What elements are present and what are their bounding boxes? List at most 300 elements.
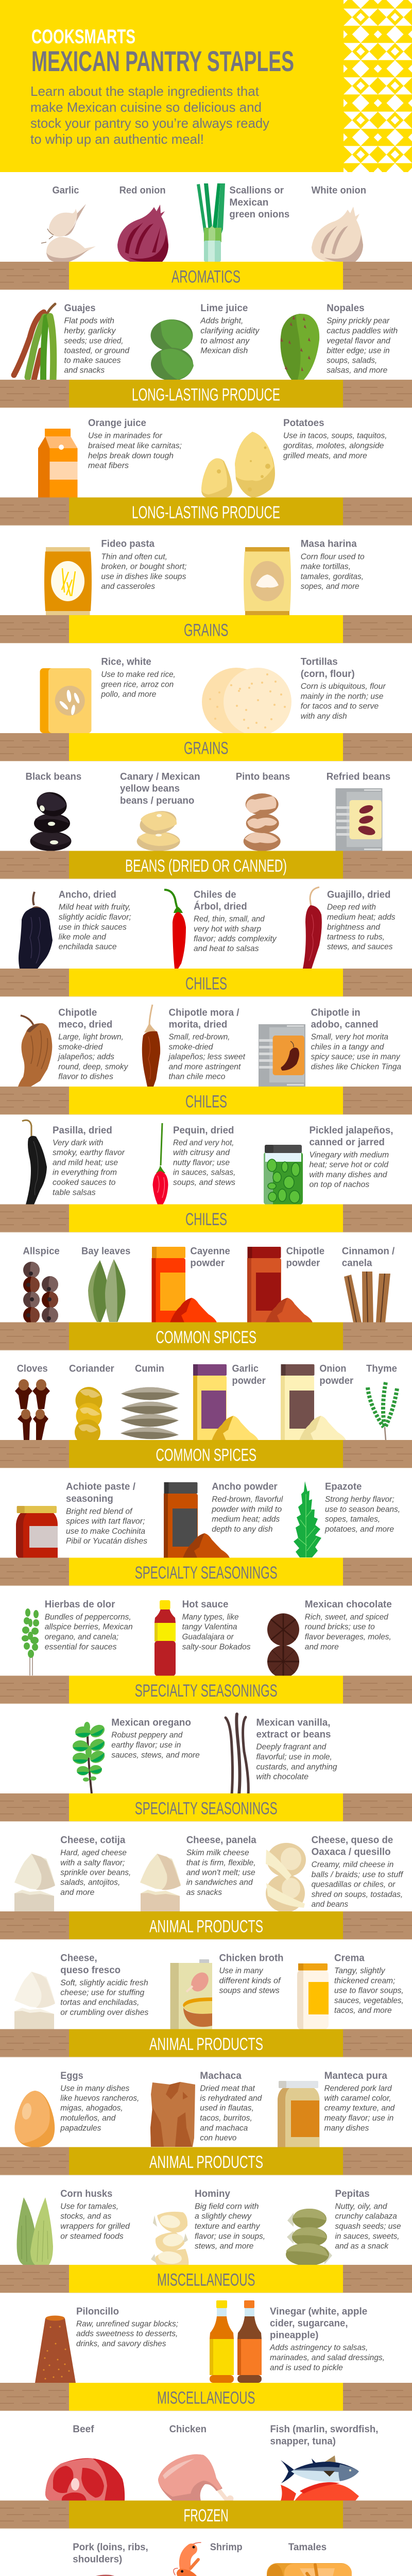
icon: hominy	[151, 2212, 188, 2265]
description	[60, 1978, 148, 2017]
description: meat fibers	[88, 461, 129, 470]
description: cheese; use for stuffing	[60, 1988, 144, 1997]
description: Flat pods with	[64, 317, 114, 326]
panel: chiles 1	[19, 887, 396, 969]
icon: refried beans can	[336, 788, 382, 851]
name	[66, 1481, 136, 1504]
name: Rice, white	[101, 656, 151, 668]
description: and beans	[312, 1900, 348, 1909]
shelf: aromatics: AROMATICS	[171, 267, 241, 286]
description: for tacos and to serve	[301, 702, 379, 711]
icon: cumin seeds	[121, 1387, 180, 1439]
icon: adobo can	[259, 1024, 305, 1087]
item: allspice	[23, 1245, 60, 1324]
shelf: chiles 1	[0, 969, 412, 997]
name: Cheese,	[60, 1953, 97, 1964]
icon: thyme	[368, 1382, 397, 1440]
name: Mexican vanilla,	[256, 1717, 331, 1728]
label: Black beans	[26, 771, 81, 782]
icon: ancho chile	[19, 892, 53, 969]
name: Corn husks	[60, 2188, 112, 2199]
description: Use in many	[219, 1967, 263, 1975]
label: shoulders)	[73, 2553, 122, 2565]
intro text: stock your pantry so you’re always ready	[30, 115, 269, 131]
shelf: aromatics	[0, 262, 412, 290]
name: Hot sauce	[182, 1599, 229, 1610]
item: onion powder	[281, 1363, 354, 1440]
description: pollo, and more	[100, 690, 156, 699]
name: Cheese, queso de	[312, 1835, 393, 1846]
name	[311, 1007, 379, 1030]
item: corn husks	[17, 2188, 130, 2265]
name: Pickled jalapeños,	[309, 1125, 393, 1136]
shelf: long-lasting produce 2: LONG-LASTING PRODUCE	[132, 503, 280, 522]
shelf: miscellaneous 2	[0, 2383, 412, 2411]
panel: specialty seasonings 3	[73, 1714, 337, 1795]
description: Mexican dish	[200, 346, 248, 355]
description: Spiny prickly pear	[327, 317, 390, 326]
icon: garlic powder jar	[193, 1364, 259, 1440]
description	[88, 432, 182, 470]
panel: long-lasting produce 2	[38, 417, 387, 498]
icon: tortillas	[202, 668, 291, 736]
name: cider, sugarcane,	[270, 2317, 348, 2329]
item: pork	[71, 2541, 148, 2576]
description	[301, 552, 365, 591]
description	[200, 317, 260, 355]
description: with chocolate	[256, 1772, 308, 1781]
icon: arbol chile	[164, 890, 186, 969]
description	[283, 432, 387, 460]
description: with citrusy and	[173, 1148, 230, 1157]
description: marinades, and salad dressings,	[270, 2353, 385, 2362]
icon: corn husks	[17, 2197, 53, 2265]
panel: frozen 2	[71, 2541, 352, 2576]
item: rice	[40, 656, 176, 733]
panel: beans	[26, 771, 390, 851]
item: shrimp	[173, 2541, 243, 2576]
item: mexican vanilla	[226, 1714, 337, 1795]
description: earthy flavor; use in	[111, 1741, 181, 1750]
label: Allspice	[23, 1245, 60, 1257]
name: Hominy	[195, 2188, 230, 2199]
name	[58, 1007, 112, 1030]
item: white onion	[312, 185, 366, 262]
name: Ancho powder	[212, 1481, 278, 1493]
description	[195, 2202, 265, 2250]
icon: cotija cheese	[14, 1854, 55, 1911]
label: Tamales	[288, 2541, 327, 2553]
description	[182, 1613, 251, 1651]
description: Red, thin, small, and	[194, 915, 265, 924]
description: Use in tacos, soups, taquitos,	[283, 432, 387, 440]
item: garlic powder	[193, 1363, 266, 1440]
description: smoke-dried	[169, 1043, 214, 1052]
description: adds sweetness to desserts,	[76, 2330, 178, 2338]
shelf: frozen 1	[0, 2501, 412, 2529]
label: Cinnamon /	[342, 1245, 395, 1257]
description	[64, 317, 130, 375]
label: Scallions or	[229, 185, 284, 196]
intro text: Learn about the staple ingredients that	[30, 83, 260, 99]
description: tartness to rubs,	[327, 933, 385, 941]
name: Chiles de	[194, 889, 236, 900]
name: Masa harina	[301, 538, 357, 550]
description	[111, 1731, 200, 1759]
description: and snacks	[64, 366, 105, 375]
description: Vinegary with medium	[309, 1150, 389, 1159]
item: bay leaves	[81, 1245, 131, 1322]
description: grilled meats, and more	[283, 451, 367, 460]
name	[194, 889, 247, 912]
description: flavor; adds complexity	[194, 935, 277, 943]
description: sprinkle over beans,	[60, 1869, 131, 1877]
description	[219, 1967, 281, 1995]
description	[173, 1139, 235, 1187]
shelf: common spices 1: COMMON SPICES	[156, 1328, 256, 1347]
shelf: beans	[0, 851, 412, 879]
description: use in dishes like soups	[101, 572, 186, 581]
intro text: make Mexican cuisine so delicious and	[30, 99, 262, 115]
label: snapper, tuna)	[270, 2435, 336, 2447]
icon: epazote	[294, 1481, 321, 1557]
shelf: common spices 1	[0, 1322, 412, 1351]
intro text: to whip up an authentic meal!	[30, 131, 204, 147]
description	[60, 1849, 131, 1897]
icon: meco chile	[18, 1015, 52, 1087]
name: Machaca	[200, 2070, 242, 2081]
description: Mild heat with fruity,	[59, 903, 131, 912]
description	[60, 2202, 130, 2241]
description: with a salty flavor;	[60, 1858, 125, 1867]
item: scallions	[197, 183, 289, 262]
label: Pork (loins, ribs,	[73, 2541, 148, 2553]
description: smoke-dried	[58, 1043, 103, 1052]
description: Deep red with	[327, 903, 376, 912]
description	[76, 2319, 178, 2348]
description	[45, 1613, 133, 1651]
description: table salsas	[53, 1188, 96, 1197]
description: round, deep, smoky	[58, 1062, 128, 1071]
name: Chipotle	[58, 1007, 97, 1018]
panel: grains 1	[44, 538, 365, 615]
item: pinto beans	[236, 771, 290, 851]
description: and heat to salsas	[194, 944, 259, 953]
description: crunchy calabaza	[335, 2212, 397, 2221]
description: is rehydrated and	[200, 2094, 262, 2103]
item: hierbas de olor	[22, 1599, 133, 1675]
icon: oregano	[73, 1722, 107, 1793]
description	[101, 552, 186, 591]
description: tortas and enchiladas,	[60, 1998, 139, 2007]
name: adobo, canned	[311, 1019, 379, 1030]
label: Beef	[73, 2424, 94, 2435]
label: Garlic	[53, 185, 79, 196]
item: cloves	[15, 1363, 50, 1440]
item: mexican oregano	[73, 1717, 200, 1793]
name: Árbol, dried	[194, 900, 247, 912]
name: Nopales	[327, 302, 365, 314]
description: Raw, unrefined sugar blocks;	[76, 2319, 178, 2329]
shelf: animal products 2: ANIMAL PRODUCTS	[149, 2035, 263, 2054]
icon: potatoes	[201, 432, 275, 498]
label: Fish (marlin, swordfish,	[270, 2424, 378, 2435]
description: use in thick sauces	[59, 923, 127, 931]
description	[53, 1139, 125, 1197]
description: Adds bright,	[200, 317, 243, 326]
name: Pequin, dried	[173, 1125, 234, 1136]
shelf: specialty seasonings 1	[0, 1558, 412, 1586]
label: Bay leaves	[81, 1245, 131, 1257]
description: stews, and sauces	[327, 943, 392, 952]
description: vegetal flavor and	[327, 336, 391, 345]
name: Tortillas	[301, 656, 338, 668]
description: seeds; use dried,	[64, 336, 124, 345]
panel: animal products 2	[14, 1953, 404, 2029]
name: pineapple)	[270, 2330, 318, 2341]
description: cooked sauces to	[53, 1178, 115, 1187]
description: con huevo	[200, 2134, 236, 2143]
name: Chicken broth	[219, 1953, 283, 1964]
description	[327, 903, 396, 952]
item: oaxaca	[266, 1835, 404, 1912]
label: powder	[286, 1257, 320, 1268]
description: Tangy, slightly	[334, 1967, 385, 1975]
description: Pibil or Yucatán dishes	[66, 1537, 147, 1546]
item: guajillo	[303, 887, 396, 969]
description: potatoes, and more	[324, 1525, 394, 1534]
name: Crema	[334, 1953, 365, 1964]
description: Bundles of peppercorns,	[45, 1613, 131, 1621]
name: Chipotle in	[311, 1007, 360, 1018]
name: extract or beans	[256, 1728, 331, 1740]
description: enchilada sauce	[59, 943, 117, 952]
name	[301, 656, 355, 680]
description: allspice berries, Mexican	[45, 1623, 133, 1632]
description	[100, 670, 176, 699]
description: essential for sauces	[45, 1642, 116, 1651]
description: creamy texture, and	[324, 2104, 395, 2113]
description: with any dish	[301, 712, 347, 721]
label: Refried beans	[327, 771, 390, 782]
label: Garlic	[232, 1363, 259, 1375]
item: fish	[270, 2424, 378, 2501]
name: Vinegar (white, apple	[270, 2306, 367, 2317]
item: masa harina	[244, 538, 365, 615]
description: or steamed foods	[60, 2232, 124, 2241]
description: Use to make red rice,	[101, 670, 176, 679]
panel: frozen 1	[45, 2424, 378, 2502]
description: and as a snack	[335, 2242, 389, 2250]
description: round bricks; use to	[305, 1623, 375, 1632]
item: chipotle in adobo	[259, 1007, 401, 1087]
description	[200, 2084, 262, 2143]
label: Chipotle	[286, 1245, 324, 1257]
icon: onion powder jar	[281, 1364, 346, 1440]
icon: coriander seeds	[75, 1387, 102, 1445]
description: Big field corn with	[195, 2202, 259, 2211]
description	[335, 2202, 401, 2250]
description: use to season beans,	[325, 1505, 400, 1514]
item: chiles de arbol	[164, 889, 277, 969]
icon: hot sauce bottle	[154, 1600, 176, 1676]
description: in sauces, sweets,	[335, 2232, 400, 2241]
icon: mora chile	[142, 1005, 160, 1087]
description: green rice, arroz con	[101, 680, 174, 689]
description: jalapeños; adds	[57, 1053, 114, 1061]
shelf: frozen 1: FROZEN	[184, 2506, 229, 2526]
description: sopes, tamales,	[325, 1515, 380, 1524]
item: garlic	[41, 185, 96, 262]
description: oregano, and canela;	[45, 1633, 118, 1641]
shelf: chiles 3	[0, 1205, 412, 1232]
description: Very dark with	[53, 1139, 104, 1147]
description: helps break down tough	[88, 451, 174, 460]
description: braised meat like carnitas;	[88, 442, 182, 450]
item: queso fresco	[14, 1953, 148, 2029]
description: depth to any dish	[212, 1525, 273, 1534]
name: Oaxaca / quesillo	[312, 1846, 391, 1858]
item: chipotle powder	[247, 1245, 324, 1323]
description: nutty flavor; use	[173, 1158, 230, 1167]
shelf: miscellaneous 2: MISCELLANEOUS	[157, 2388, 255, 2408]
description: Corn flour used to	[301, 552, 365, 561]
label: Red onion	[119, 185, 166, 196]
description: salsas, and more	[327, 366, 387, 375]
name: Potatoes	[283, 417, 324, 429]
description: papadzules	[60, 2124, 101, 2132]
label: Mexican	[229, 197, 268, 208]
label	[229, 185, 289, 220]
description: Hard, aged cheese	[60, 1849, 127, 1857]
icon: pork	[71, 2574, 142, 2576]
panel: miscellaneous 1	[17, 2188, 401, 2266]
name: Guajes	[64, 302, 96, 314]
description: slightly acidic flavor;	[59, 913, 131, 922]
item: nopales	[280, 302, 398, 380]
description: flavor; use in soups,	[195, 2232, 265, 2241]
name: Mexican oregano	[111, 1717, 191, 1728]
description	[66, 1507, 147, 1546]
description: with many dishes and	[309, 1171, 388, 1179]
icon: chipotle powder jar	[247, 1247, 313, 1323]
shelf: chiles 1: CHILES	[185, 974, 227, 993]
name	[270, 2306, 367, 2341]
description: and is used to pickle	[270, 2363, 343, 2372]
description: jalapeños; less sweet	[168, 1053, 246, 1061]
panel: animal products 3	[14, 2070, 395, 2147]
name: Manteca pura	[324, 2070, 387, 2081]
label	[232, 1363, 266, 1386]
icon: vanilla pods	[226, 1714, 248, 1795]
shelf: grains 2: GRAINS	[184, 738, 228, 758]
shelf: specialty seasonings 2	[0, 1675, 412, 1704]
label	[286, 1245, 324, 1268]
description: in everything from	[53, 1168, 117, 1177]
shelf: chiles 2	[0, 1087, 412, 1115]
shelf: animal products 2	[0, 2029, 412, 2058]
description: like huevos rancheros,	[60, 2094, 139, 2103]
name: Cheese, cotija	[60, 1835, 125, 1846]
description: that is firm, flexible,	[186, 1858, 256, 1867]
item: red onion	[117, 185, 168, 262]
description: to almost any	[200, 336, 250, 345]
label: Coriander	[69, 1363, 114, 1375]
icon: allspice berries	[23, 1262, 58, 1324]
description: motuleños, and	[60, 2114, 116, 2123]
icon: tamales	[267, 2563, 352, 2576]
shelf: long-lasting produce 1	[0, 380, 412, 408]
item: cotija	[14, 1835, 131, 1911]
description: used in flautas,	[200, 2104, 254, 2113]
icon: pepitas	[286, 2209, 332, 2266]
icon: machaca	[150, 2082, 195, 2147]
item: crema	[297, 1953, 404, 2029]
item: vinegar	[210, 2300, 385, 2383]
item: manteca	[278, 2070, 395, 2147]
name: meco, dried	[58, 1019, 112, 1030]
shelf: specialty seasonings 3: SPECIALTY SEASONINGS	[135, 1799, 278, 1818]
description: dishes like Chicken Tinga	[311, 1062, 401, 1071]
description: tacos, burritos,	[200, 2114, 252, 2123]
description: medium heat; adds	[212, 1515, 280, 1524]
description	[57, 1033, 128, 1081]
description	[269, 2344, 385, 2372]
item: cinnamon	[342, 1245, 395, 1323]
description: soups and stews	[219, 1987, 280, 1995]
description: many dishes	[324, 2124, 369, 2132]
label	[120, 771, 200, 806]
icon: queso fresco	[14, 1972, 55, 2029]
icon: juice carton	[38, 429, 77, 498]
description: Use in marinades for	[88, 432, 163, 440]
description: Use for tamales,	[60, 2202, 118, 2211]
description	[327, 317, 398, 375]
item: potatoes	[201, 417, 387, 498]
description: Use in many dishes	[60, 2084, 129, 2093]
icon: shrimp	[173, 2543, 201, 2576]
description: Robust peppery and	[111, 1731, 183, 1740]
description: sopes, and more	[301, 582, 359, 591]
description: custards, and anything	[256, 1762, 337, 1771]
item: machaca	[150, 2070, 262, 2147]
description	[305, 1613, 391, 1651]
name	[256, 1717, 331, 1740]
panel: common spices 2	[15, 1363, 397, 1445]
icon: rice box	[40, 668, 92, 733]
name: Pepitas	[335, 2188, 370, 2199]
name: Guajillo, dried	[327, 889, 390, 900]
icon: fish	[281, 2455, 359, 2501]
shelf: animal products 1	[0, 1911, 412, 1940]
shelf: grains 2	[0, 733, 412, 761]
panel: aromatics	[41, 183, 366, 262]
name	[309, 1125, 393, 1148]
description: bitter edge; use in	[327, 346, 390, 355]
name: Lime juice	[200, 302, 248, 314]
item: pepitas	[286, 2188, 401, 2266]
item: hominy	[151, 2188, 265, 2265]
label: canela	[342, 1257, 372, 1268]
description: soups, salads,	[327, 357, 377, 365]
description: Creamy, mild cheese in	[312, 1860, 393, 1869]
description: as snacks	[186, 1888, 222, 1897]
label: green onions	[229, 209, 289, 220]
description: smoky, earthy flavor	[53, 1148, 125, 1157]
name	[60, 1953, 121, 1976]
panel: specialty seasonings 1	[16, 1481, 400, 1558]
description: on top of nachos	[309, 1180, 369, 1189]
